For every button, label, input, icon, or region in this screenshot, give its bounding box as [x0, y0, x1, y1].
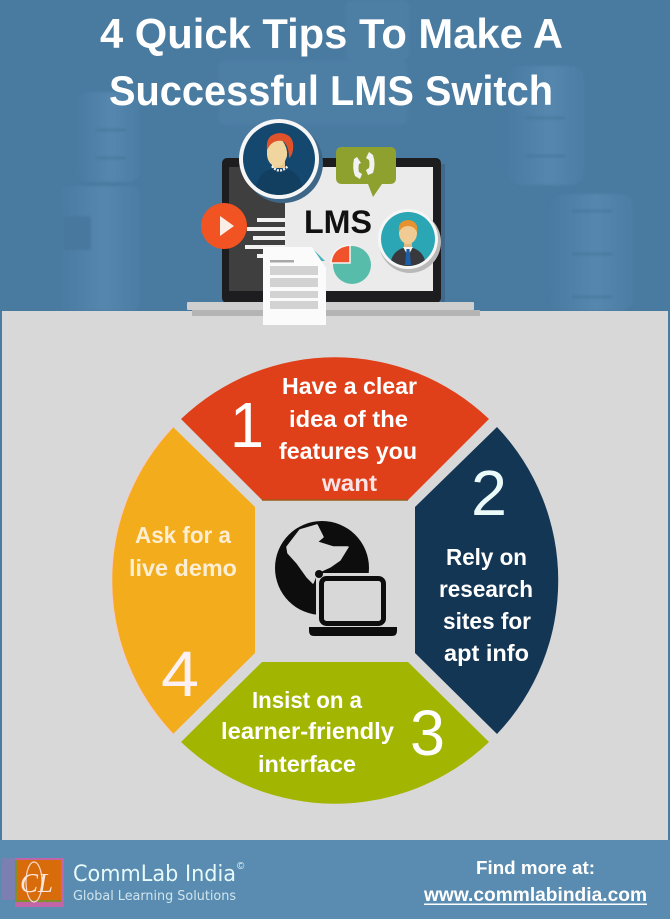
segment 1: clear idea of features: Have a clear [282, 373, 417, 399]
company name: © [237, 861, 245, 872]
logo [2, 858, 64, 907]
main grey panel [2, 311, 668, 840]
laptop screen [222, 158, 441, 303]
footer bar [0, 840, 670, 919]
segment 3: learner-friendly interface [181, 662, 489, 804]
LMS laptop illustration [187, 119, 480, 325]
segment 4: live demo [112, 427, 255, 734]
segment 2: research sites: sites for [443, 608, 531, 634]
document [263, 247, 326, 325]
segment 3: learner-friendly interface: interface [258, 751, 356, 777]
website callout: Find more at: [476, 858, 595, 878]
segment 4: live demo: live demo [129, 555, 237, 581]
segment 3: learner-friendly interface: learner-friendly [221, 718, 394, 744]
segment 2: research sites: apt info [444, 640, 529, 666]
segment 1: clear idea of features: idea of the [289, 406, 408, 432]
segment 3: learner-friendly interface: 3 [410, 697, 445, 769]
segment 1: clear idea of features: features you [279, 438, 417, 464]
website callout: www.commlabindia.com [423, 885, 647, 906]
company name: CommLab India [73, 862, 236, 887]
header background [0, 0, 670, 312]
sidebar lines [245, 218, 285, 258]
phone speech bubble [336, 147, 396, 197]
laptop base [187, 302, 480, 316]
segment 1: clear idea of features: want [321, 470, 377, 496]
segment 1: clear idea of features [181, 357, 489, 500]
play button [201, 203, 247, 249]
LMS label: LMS [304, 204, 372, 240]
man avatar [378, 209, 441, 273]
title [100, 10, 563, 114]
logo: CL [20, 868, 53, 898]
tip wheel [112, 357, 558, 804]
title: Successful LMS Switch [109, 67, 553, 114]
laptop shadow [441, 164, 445, 302]
woman avatar [239, 119, 323, 203]
segment 2: research sites: 2 [471, 457, 507, 529]
segment 2: research sites: Rely on [446, 544, 527, 570]
company name [73, 861, 245, 904]
segment 4: live demo: Ask for a [135, 522, 231, 548]
icon: globe and laptop [275, 521, 397, 636]
segment 2: research sites [415, 427, 558, 734]
segment 1: clear idea of features: 1 [230, 389, 264, 461]
title: 4 Quick Tips To Make A [100, 10, 563, 57]
segment 3: learner-friendly interface: Insist on a [252, 687, 362, 713]
company name: Global Learning Solutions [73, 889, 236, 904]
segment 4: live demo: 4 [161, 638, 199, 710]
website callout [423, 858, 647, 906]
segment 2: research sites: research [439, 576, 533, 602]
pie chart [312, 245, 371, 284]
